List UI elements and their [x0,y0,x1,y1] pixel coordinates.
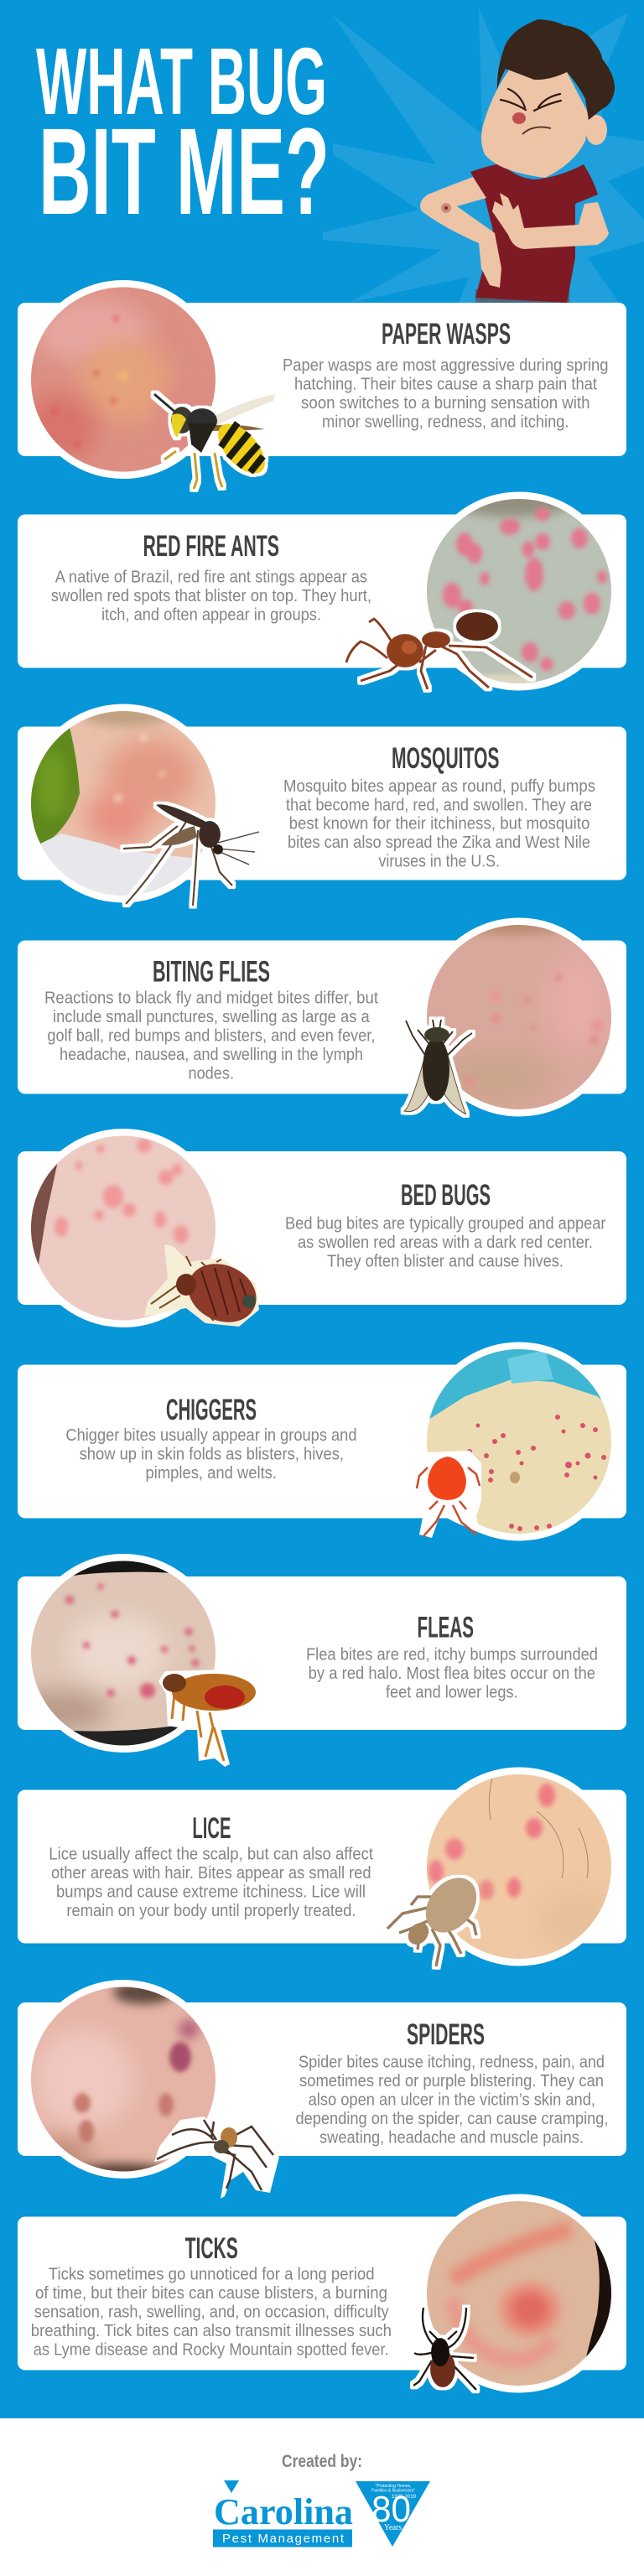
description: soon switches to a burning sensation with [301,394,590,413]
heading: BED BUGS [401,1179,491,1212]
bite photo [31,1561,216,1746]
description: nodes. [188,1064,234,1083]
icon: fly [404,1020,472,1114]
description: best known for their itchiness, but mosquito [289,815,589,834]
icon: spider [154,2116,279,2199]
description: breathing. Tick bites can also transmit illnesses such [31,2322,392,2340]
description: Chigger bites usually appear in groups and [65,1426,357,1445]
description [65,1426,357,1483]
starburst behind character [323,8,644,303]
panel: paper wasps [18,280,626,489]
frown [522,127,551,134]
description: remain on your body until properly treated. [66,1902,356,1920]
hair [497,19,615,120]
description: They often blister and cause hives. [327,1252,564,1270]
description [306,1645,598,1701]
description: as Lyme disease and Rocky Mountain spotted fever. [34,2341,389,2360]
panel: bed bugs [18,1129,626,1333]
logo: Carolina Pest Management: Carolina [214,2491,353,2532]
logo: 80 years badge: Years [384,2523,402,2532]
description [283,356,609,431]
description: viruses in the U.S. [379,853,500,871]
face [481,69,589,178]
bite photo [31,1987,216,2172]
description: golf ball, red bumps and blisters, and even fever, [47,1026,375,1045]
logo: 80 years badge: Families & Businesses" [371,2489,415,2494]
description: Lice usually affect the scalp, but can also affect [49,1845,373,1863]
bite photo [427,499,611,683]
bite photo [427,1774,611,1959]
left arm [420,177,501,288]
icon: chigger [417,1451,481,1538]
card [18,1789,626,1944]
panel: lice [18,1761,626,1966]
logo: Carolina Pest Management: Pest Management [222,2532,345,2546]
icon: fire ant [346,612,532,689]
right arm and hand [492,193,609,249]
card [18,726,626,880]
bite photo [31,287,216,471]
description: Paper wasps are most aggressive during spring [283,356,609,375]
logo: 80 years badge: 80 [371,2489,411,2530]
heading: TICKS [185,2232,238,2265]
description: by a red halo. Most flea bites occur on the [309,1665,595,1683]
panel: spiders [18,1979,626,2199]
heading: CHIGGERS [166,1394,257,1426]
heading: PAPER WASPS [382,318,511,351]
card [18,515,626,667]
description: bites can also spread the Zika and West Nile [288,834,590,852]
description: headache, nausea, and swelling in the lymph [60,1046,363,1064]
description [283,777,595,871]
card [18,1151,626,1305]
card [18,2217,626,2370]
card [18,1365,626,1518]
description: minor swelling, redness, and itching. [322,413,569,431]
icon: bed bug [144,1244,266,1333]
logo: Carolina Pest Management [213,2480,353,2547]
description: itch, and often appear in groups. [101,606,321,625]
title [36,29,330,241]
bite photo [31,711,216,896]
description: include small punctures, swelling as large as a [53,1008,370,1026]
description: Ticks sometimes go unnoticed for a long period [49,2266,375,2284]
squinting eyes [501,89,561,111]
description: as swollen red areas with a dark red center. [298,1233,593,1252]
heading: SPIDERS [407,2018,485,2051]
panel: red fire ants [18,490,626,691]
description: Spider bites cause itching, redness, pain, and [299,2054,605,2072]
panel: fleas [8,1551,626,1767]
title: WHAT BUG [36,29,327,134]
heading: FLEAS [418,1612,474,1644]
description: Reactions to black fly and midget bites differ, but [44,989,378,1007]
bite photo [427,925,611,1109]
heading: RED FIRE ANTS [143,530,279,563]
logo: 80 years badge [356,2481,430,2547]
description: Mosquito bites appear as round, puffy bumps [283,777,595,796]
icon: louse [387,1868,487,1966]
title: BIT ME? [39,103,330,241]
description: sometimes red or purple blistering. They can [299,2072,604,2090]
description [51,569,371,625]
card [18,2002,626,2156]
panel: ticks [18,2194,626,2393]
logo: 80 years badge: 1939-2019 [392,2495,417,2500]
description: other areas with hair. Bites appear as small red [51,1864,371,1883]
description: feet and lower legs. [386,1683,518,1701]
character: boy with bug bite [420,19,615,304]
red nose [512,112,526,124]
description: A native of Brazil, red fire ant stings appear as [55,569,367,587]
description: show up in skin folds as blisters, hives, [80,1445,344,1463]
panel: mosquitos [18,704,626,906]
icon: tick [413,2308,476,2390]
description [44,989,378,1083]
icon: flea [158,1670,257,1767]
heading: LICE [192,1812,231,1845]
icon: wasp [154,394,275,489]
logo: 80 years badge: "Protecting Homes, [376,2484,411,2489]
description: hatching. Their bites cause a sharp pain that [294,375,597,393]
heading: MOSQUITOS [392,742,500,775]
description [31,2266,392,2360]
description [285,1214,606,1270]
pants [475,289,569,304]
description [49,1845,373,1920]
description: depending on the spider, can cause cramping, [295,2110,609,2128]
description: that become hard, red, and swollen. They are [286,796,592,814]
heading: BITING FLIES [153,956,270,989]
description [295,2054,609,2148]
bite photo [31,1135,216,1320]
description: Flea bites are red, itchy bumps surrounded [306,1645,598,1664]
card [18,941,626,1093]
description: bumps and cause extreme itchiness. Lice will [56,1883,366,1902]
ear [585,115,607,145]
description: pimples, and welts. [146,1464,277,1483]
bite mark [441,203,451,213]
description: sweating, headache and muscle pains. [319,2129,584,2148]
card [18,1576,626,1730]
panel: chiggers [18,1342,626,1543]
description: Bed bug bites are typically grouped and appear [285,1214,606,1233]
bite photo [427,1349,611,1534]
footer credit: Created by: [282,2452,362,2471]
icon: mosquito [123,804,259,906]
panel: biting flies [18,917,626,1117]
description: sensation, rash, swelling, and, on occasion, difficulty [34,2303,389,2322]
card [18,303,626,456]
description: of time, but their bites can cause blisters, a burning [35,2284,387,2303]
bite photo [427,2201,611,2386]
description: also open an ulcer in the victim’s skin and, [309,2091,595,2110]
description: swollen red spots that blister on top. They hurt, [51,587,371,605]
shirt [470,164,598,303]
